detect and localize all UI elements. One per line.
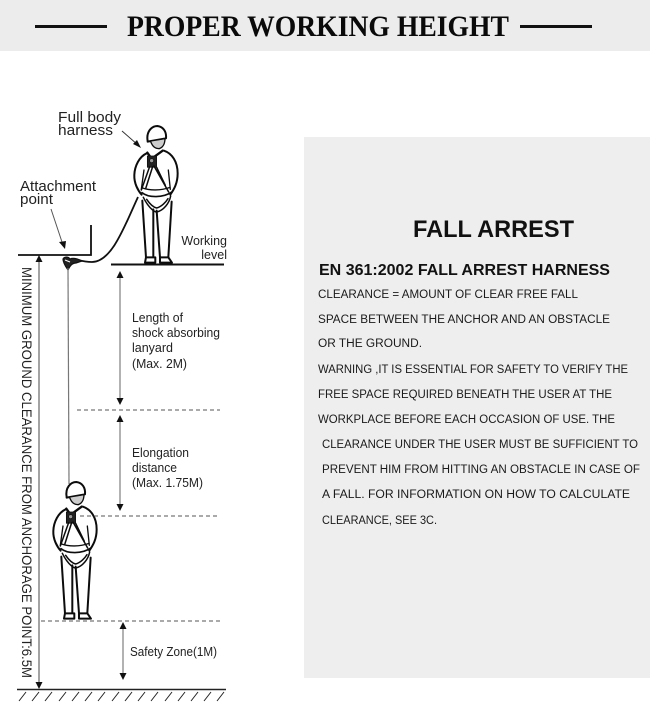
rotated clearance label: MINIMUM GROUND CLEARANCE FROM ANCHORAGE POINT:6.5M <box>19 267 35 678</box>
body text: CLEARANCE = AMOUNT OF CLEAR FREE FALL <box>318 287 578 301</box>
dashed level lines <box>41 410 220 621</box>
person: working level <box>134 126 178 263</box>
lanyard rope and hook <box>63 197 138 270</box>
label: full body harness: harness <box>58 123 113 139</box>
label: lanyard length: shock absorbing <box>132 326 220 340</box>
label: lanyard length: lanyard <box>132 341 173 355</box>
body text: PREVENT HIM FROM HITTING AN OBSTACLE IN CASE OF <box>322 462 640 476</box>
dimension arrow: lanyard <box>116 271 124 405</box>
body text: FREE SPACE REQUIRED BENEATH THE USER AT THE <box>318 387 612 401</box>
body text: A FALL. FOR INFORMATION ON HOW TO CALCULATE <box>322 487 630 501</box>
body text: WARNING ,IT IS ESSENTIAL FOR SAFETY TO VERIFY THE <box>318 362 628 376</box>
label: safety zone: Safety Zone(1M) <box>130 645 217 659</box>
label: working level: level <box>201 248 227 262</box>
body text: WORKPLACE BEFORE EACH OCCASION OF USE. THE <box>318 412 615 426</box>
body text: OR THE GROUND. <box>318 336 422 350</box>
diagram: ledge <box>18 225 91 255</box>
subheading: EN 361:2002 FALL ARREST HARNESS <box>319 262 610 279</box>
dimension arrow: elongation <box>116 415 124 511</box>
dimension arrow: safety zone <box>120 622 126 680</box>
label: elongation: distance <box>132 461 177 475</box>
header band <box>0 0 650 51</box>
anchor lifeline <box>68 268 69 484</box>
label: attachment point: Attachment <box>20 179 96 195</box>
label: full body harness: Full body <box>58 110 122 126</box>
panel heading: FALL ARREST <box>413 216 574 243</box>
working level platform <box>111 264 224 266</box>
arrow: attachment <box>51 209 66 249</box>
label: lanyard length: Length of <box>132 311 184 325</box>
title: PROPER WORKING HEIGHT <box>127 11 509 43</box>
ground with hatching <box>17 690 226 701</box>
minimum clearance dimension arrow <box>36 255 42 689</box>
body text: CLEARANCE, SEE 3C. <box>322 513 437 527</box>
label: attachment point: point <box>20 192 53 208</box>
body text: SPACE BETWEEN THE ANCHOR AND AN OBSTACLE <box>318 312 610 326</box>
panel: fall arrest <box>304 137 650 678</box>
label: elongation: Elongation <box>132 446 189 460</box>
person: after fall <box>53 482 97 619</box>
arrow: harness <box>122 131 141 148</box>
label: elongation: (Max. 1.75M) <box>132 476 203 490</box>
label: lanyard length: (Max. 2M) <box>132 357 187 371</box>
body text <box>318 287 640 527</box>
label: working level: Working <box>181 234 227 248</box>
